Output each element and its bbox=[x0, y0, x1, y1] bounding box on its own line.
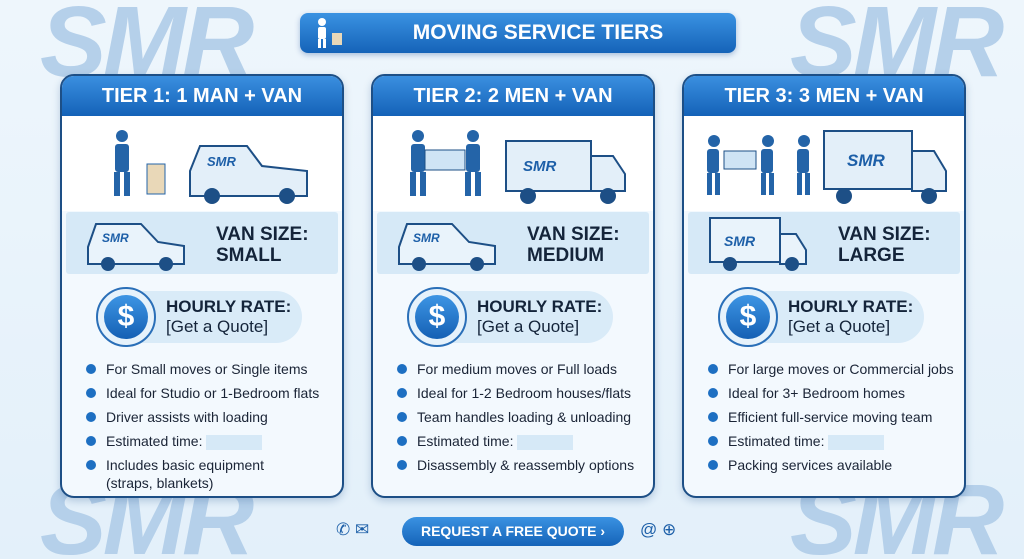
hourly rate: HOURLY RATE: bbox=[477, 297, 602, 316]
van size band: MEDIUM bbox=[527, 245, 604, 266]
hourly rate: $ bbox=[118, 300, 134, 333]
illustration: mover and van bbox=[62, 116, 342, 211]
bullet list: For Small moves or Single items bbox=[106, 361, 308, 377]
bullet list: Estimated time: bbox=[417, 433, 513, 449]
hourly rate bbox=[413, 291, 613, 343]
hourly rate: HOURLY RATE: bbox=[788, 297, 913, 316]
heading: TIER 1: 1 MAN + VAN bbox=[102, 85, 302, 107]
bullet list: Driver assists with loading bbox=[106, 409, 268, 425]
heading bbox=[62, 76, 342, 116]
bullet list: Disassembly & reassembly options bbox=[417, 457, 634, 473]
bullet list: For medium moves or Full loads bbox=[417, 361, 617, 377]
button: request a free quote: REQUEST A FREE QUOTE › bbox=[421, 523, 605, 539]
hourly rate: $ bbox=[429, 300, 445, 333]
bullet list: Includes basic equipment bbox=[106, 457, 264, 473]
van size band bbox=[66, 212, 338, 274]
van size band: VAN SIZE: bbox=[838, 224, 931, 245]
illustration: three movers and truck bbox=[684, 116, 964, 211]
van size band: SMR bbox=[413, 231, 440, 245]
bullet list: Team handles loading & unloading bbox=[417, 409, 631, 425]
footer web icons: @ ⊕ bbox=[640, 520, 676, 539]
van size band: SMR bbox=[102, 231, 129, 245]
bullet list: Ideal for 1-2 Bedroom houses/flats bbox=[417, 385, 631, 401]
title banner bbox=[300, 13, 736, 53]
hourly rate: [Get a Quote] bbox=[166, 317, 268, 336]
bullet list: Ideal for 3+ Bedroom homes bbox=[728, 385, 905, 401]
icon: mover with trolley bbox=[318, 18, 342, 48]
panel: tier 1 bbox=[60, 74, 344, 498]
van size band: VAN SIZE: bbox=[216, 224, 309, 245]
illustration: mover and van: SMR bbox=[207, 154, 236, 169]
van size band: SMALL bbox=[216, 245, 281, 266]
hourly rate bbox=[102, 291, 302, 343]
van size band bbox=[688, 212, 960, 274]
hourly rate: HOURLY RATE: bbox=[166, 297, 291, 316]
bullet list bbox=[708, 361, 954, 473]
van size band: LARGE bbox=[838, 245, 904, 266]
panel: tier 3 bbox=[682, 74, 966, 498]
bullet list: Efficient full-service moving team bbox=[728, 409, 932, 425]
bullet list bbox=[86, 361, 319, 491]
hourly rate: [Get a Quote] bbox=[477, 317, 579, 336]
bullet list: Estimated time: bbox=[728, 433, 824, 449]
van size band: VAN SIZE: bbox=[527, 224, 620, 245]
hourly rate bbox=[724, 291, 924, 343]
bullet list: Estimated time: bbox=[106, 433, 202, 449]
panel: tier 1: (straps, blankets) bbox=[106, 475, 213, 491]
illustration: two movers and van: SMR bbox=[523, 158, 556, 175]
bullet list: Packing services available bbox=[728, 457, 892, 473]
bullet list: Ideal for Studio or 1-Bedroom flats bbox=[106, 385, 319, 401]
illustration: two movers and van bbox=[373, 116, 653, 211]
illustration: three movers and truck: SMR bbox=[847, 151, 886, 170]
panel: tier 2 bbox=[371, 74, 655, 498]
van size band: SMR bbox=[724, 233, 756, 249]
heading bbox=[373, 76, 653, 116]
button: request a free quote bbox=[402, 517, 624, 546]
van size band bbox=[377, 212, 649, 274]
bullet list bbox=[397, 361, 634, 473]
hourly rate: [Get a Quote] bbox=[788, 317, 890, 336]
heading bbox=[684, 76, 964, 116]
heading: TIER 3: 3 MEN + VAN bbox=[724, 85, 924, 107]
footer contact icons: ✆ ✉ bbox=[336, 520, 369, 539]
title banner: MOVING SERVICE TIERS bbox=[413, 21, 663, 44]
heading: TIER 2: 2 MEN + VAN bbox=[413, 85, 613, 107]
bullet list: For large moves or Commercial jobs bbox=[728, 361, 954, 377]
hourly rate: $ bbox=[740, 300, 756, 333]
